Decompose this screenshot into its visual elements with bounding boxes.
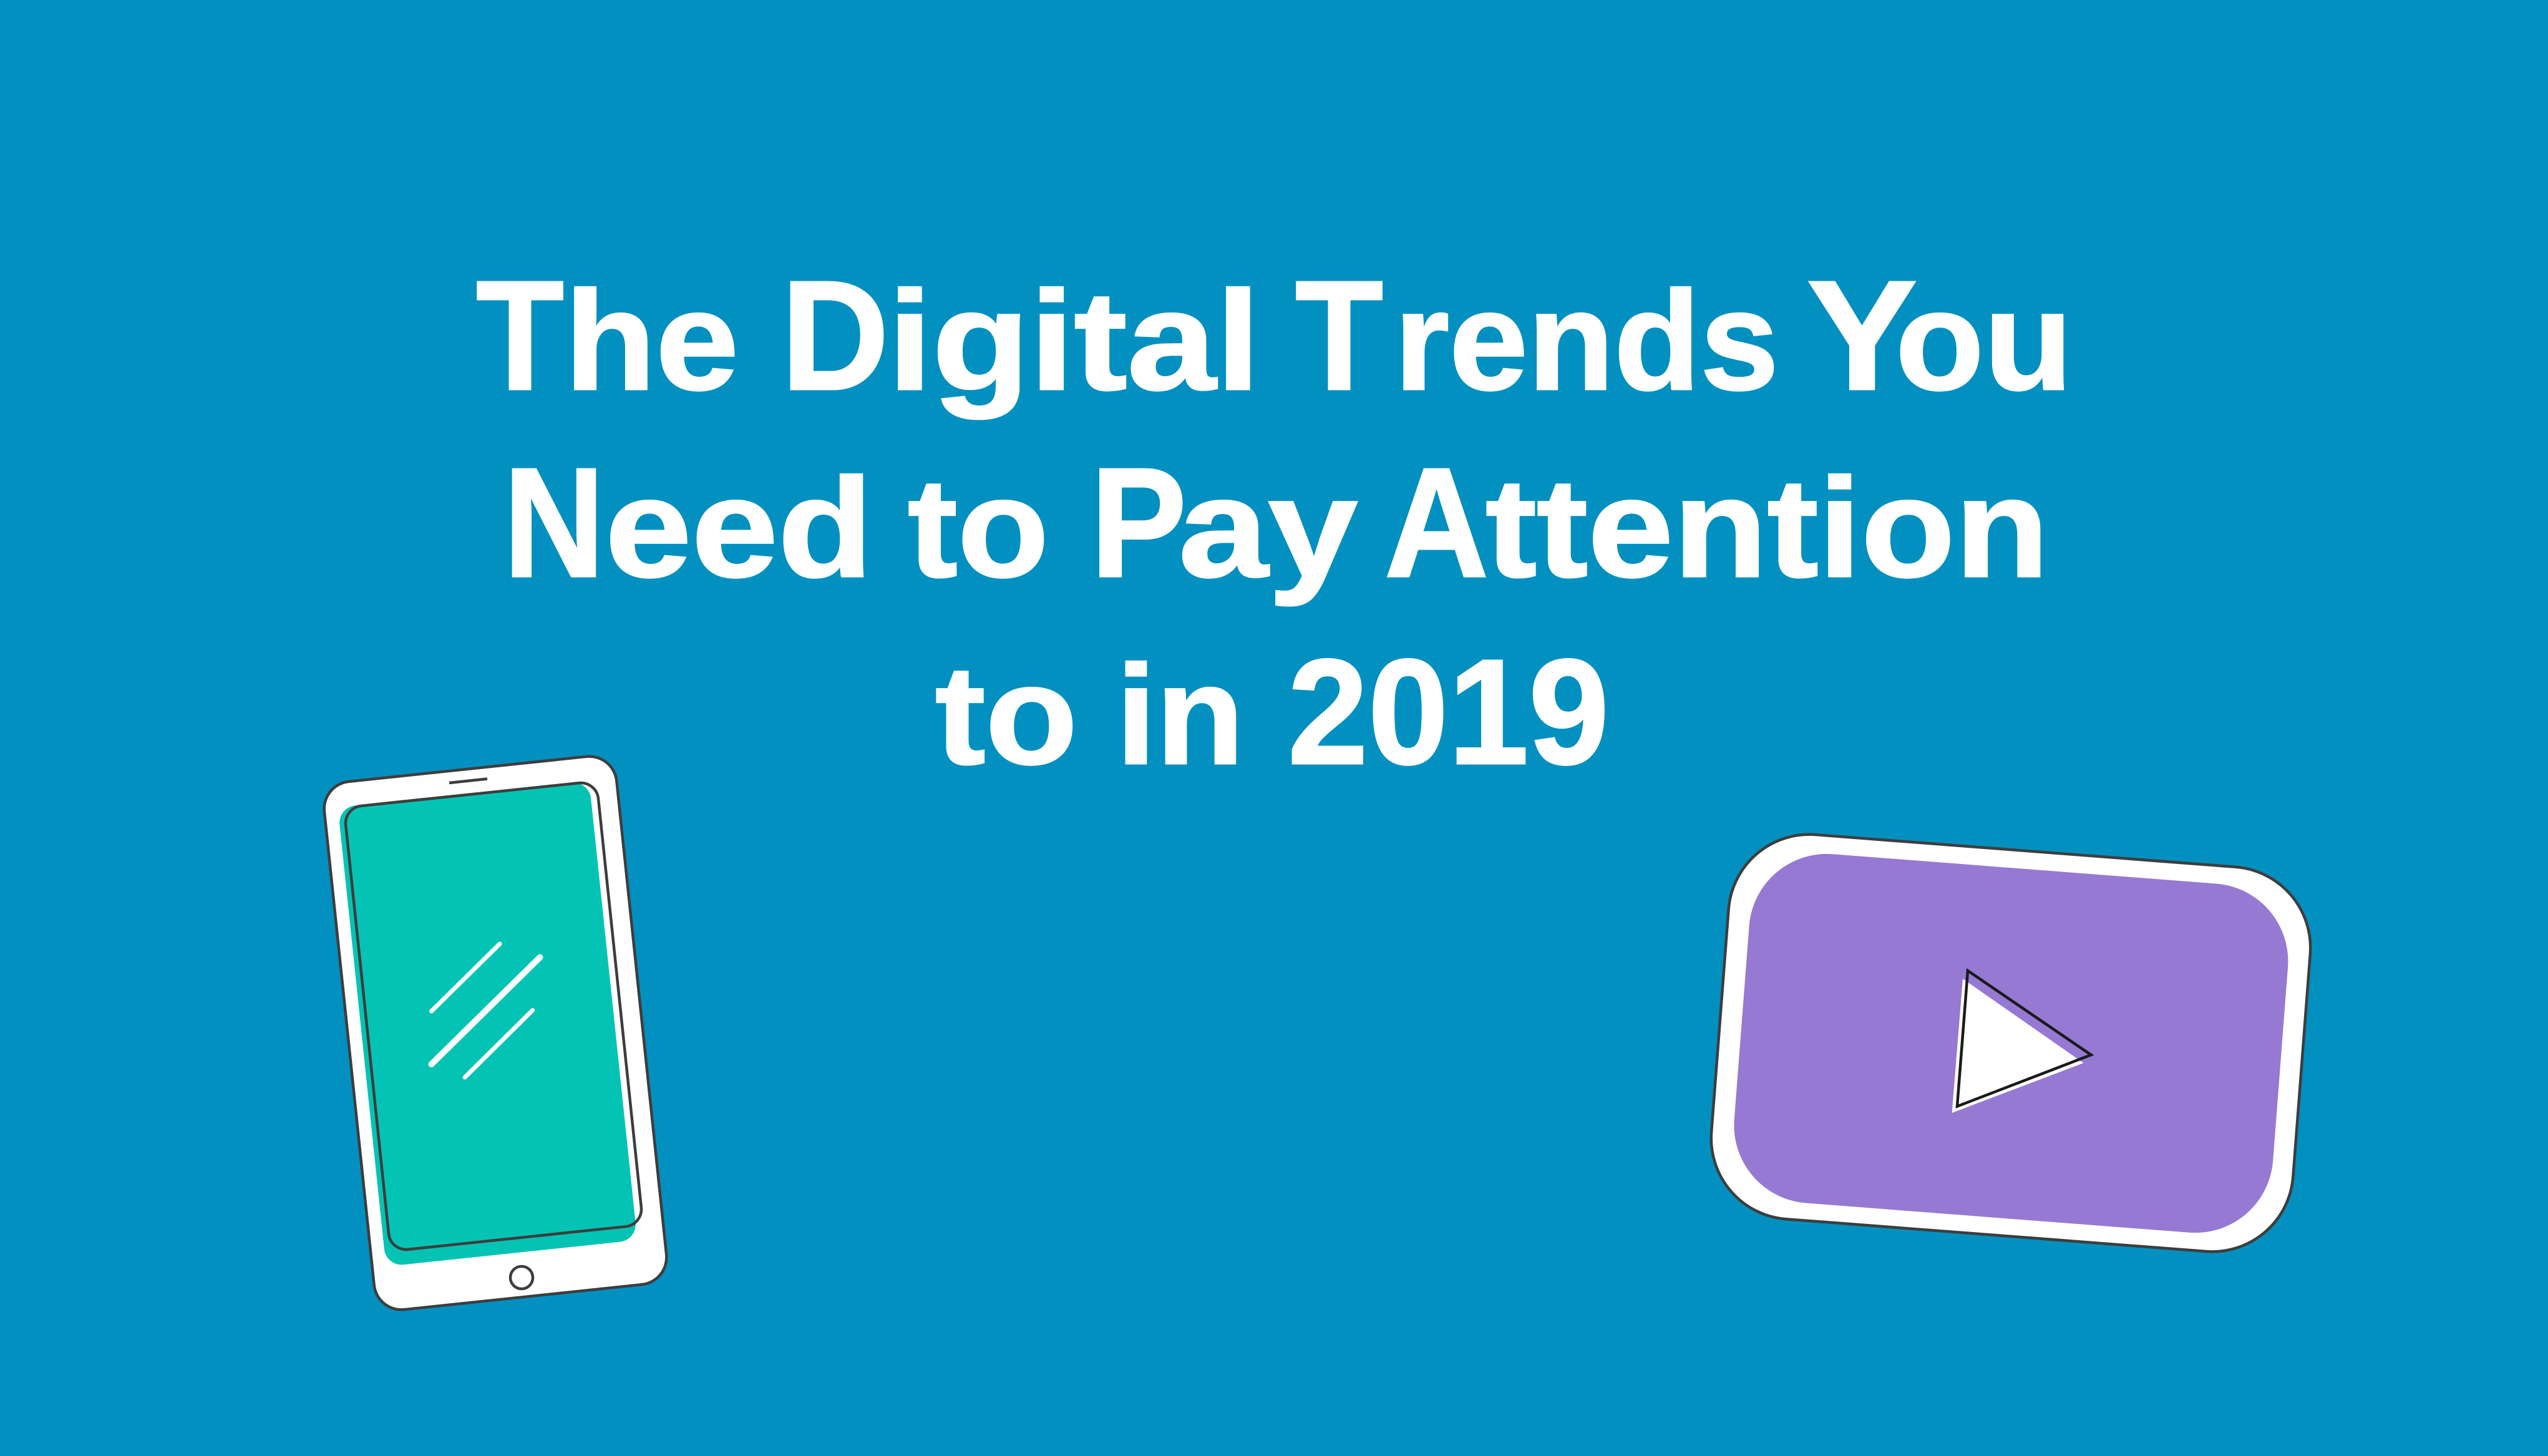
title line 1: ou — [1895, 261, 2073, 419]
title line 1: he — [565, 261, 739, 419]
screen reflection — [432, 944, 540, 1077]
title line 2: ay — [1179, 449, 1358, 606]
title line 2: P — [1091, 435, 1187, 609]
tablet home button — [510, 1266, 533, 1289]
play triangle — [1952, 979, 2084, 1113]
title line 1: Y — [1807, 248, 1917, 422]
title line 1 — [476, 248, 2073, 422]
tablet speaker — [449, 779, 487, 783]
icon: tablet — [321, 754, 669, 1313]
title line 2: A — [1384, 435, 1489, 609]
tablet screen — [338, 781, 638, 1266]
video screen — [1728, 848, 2294, 1238]
title line 3: to — [935, 636, 1077, 794]
title line 2 — [503, 435, 2049, 609]
title line 2: ttention — [1486, 449, 2049, 606]
title line 1: T — [476, 248, 564, 422]
tablet body — [321, 754, 669, 1313]
video frame — [1705, 828, 2317, 1258]
title line 1: T — [1295, 248, 1383, 422]
title line 3: in — [1116, 636, 1244, 794]
title line 2: to — [908, 449, 1049, 606]
title line 3: 2019 — [1288, 628, 1609, 795]
title line 1: rends — [1394, 261, 1779, 419]
tablet screen outline — [344, 781, 643, 1251]
play triangle outline — [1957, 971, 2091, 1107]
title line 1: D — [781, 248, 889, 422]
title line 1: igital — [888, 261, 1260, 419]
icon: video play button — [1705, 828, 2317, 1258]
title line 2: eed — [605, 449, 873, 606]
title — [476, 248, 2073, 795]
title line 3 — [935, 628, 1609, 795]
title line 2: N — [503, 435, 605, 609]
